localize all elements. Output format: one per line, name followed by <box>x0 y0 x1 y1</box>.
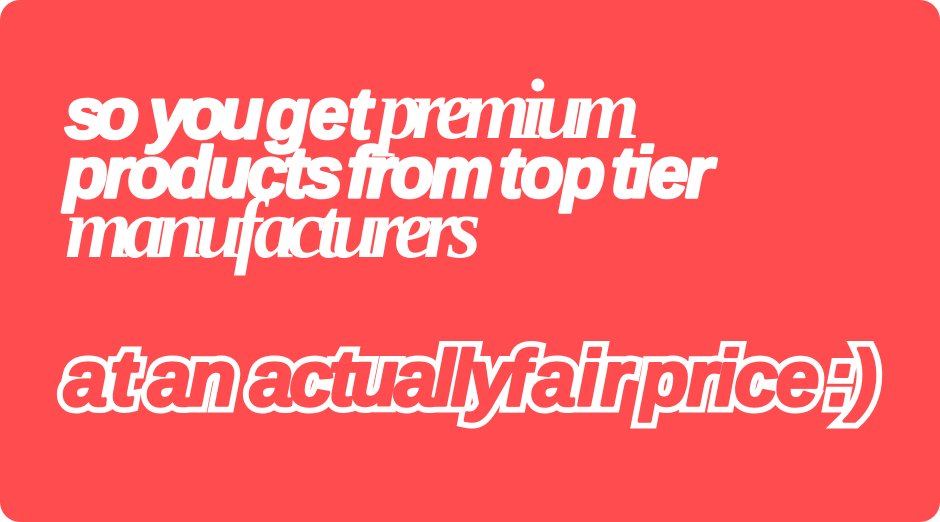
callout: at an actually fair price outlined: an <box>148 334 236 422</box>
heading: so you get premium products from top tier manufacturers: top <box>499 134 605 213</box>
callout: at an actually fair price outlined: an <box>148 334 236 422</box>
callout: at an actually fair price outlined: actually <box>250 334 516 422</box>
heading: so you get premium products from top tier manufacturers: manufacturers <box>65 180 481 276</box>
callout: at an actually fair price outlined: at <box>64 334 139 422</box>
heading: so you get premium products from top tier manufacturers <box>62 61 716 276</box>
heading: so you get premium products from top tier manufacturers: get <box>265 75 375 154</box>
callout: at an actually fair price outlined: price <box>639 334 819 422</box>
heading: so you get premium products from top tier manufacturers: premium <box>371 61 640 157</box>
callout: at an actually fair price outlined: :) <box>827 334 877 422</box>
callout: at an actually fair price outlined: :) <box>827 334 877 422</box>
callout: at an actually fair price outlined: actually <box>250 334 516 422</box>
callout: at an actually fair price outlined: price <box>639 334 819 422</box>
callout: at an actually fair price outlined <box>64 334 877 422</box>
heading: so you get premium products from top tier manufacturers: you <box>146 75 263 154</box>
callout: at an actually fair price outlined: at <box>64 334 139 422</box>
heading: so you get premium products from top tier manufacturers: from <box>347 134 493 213</box>
callout: at an actually fair price outlined: fair <box>505 334 635 422</box>
heading: so you get premium products from top tier manufacturers: products <box>62 134 343 213</box>
callout: at an actually fair price outlined: fair <box>505 334 635 422</box>
heading: so you get premium products from top tier manufacturers: tier <box>611 134 716 213</box>
heading: so you get premium products from top tier manufacturers: so <box>65 75 139 154</box>
